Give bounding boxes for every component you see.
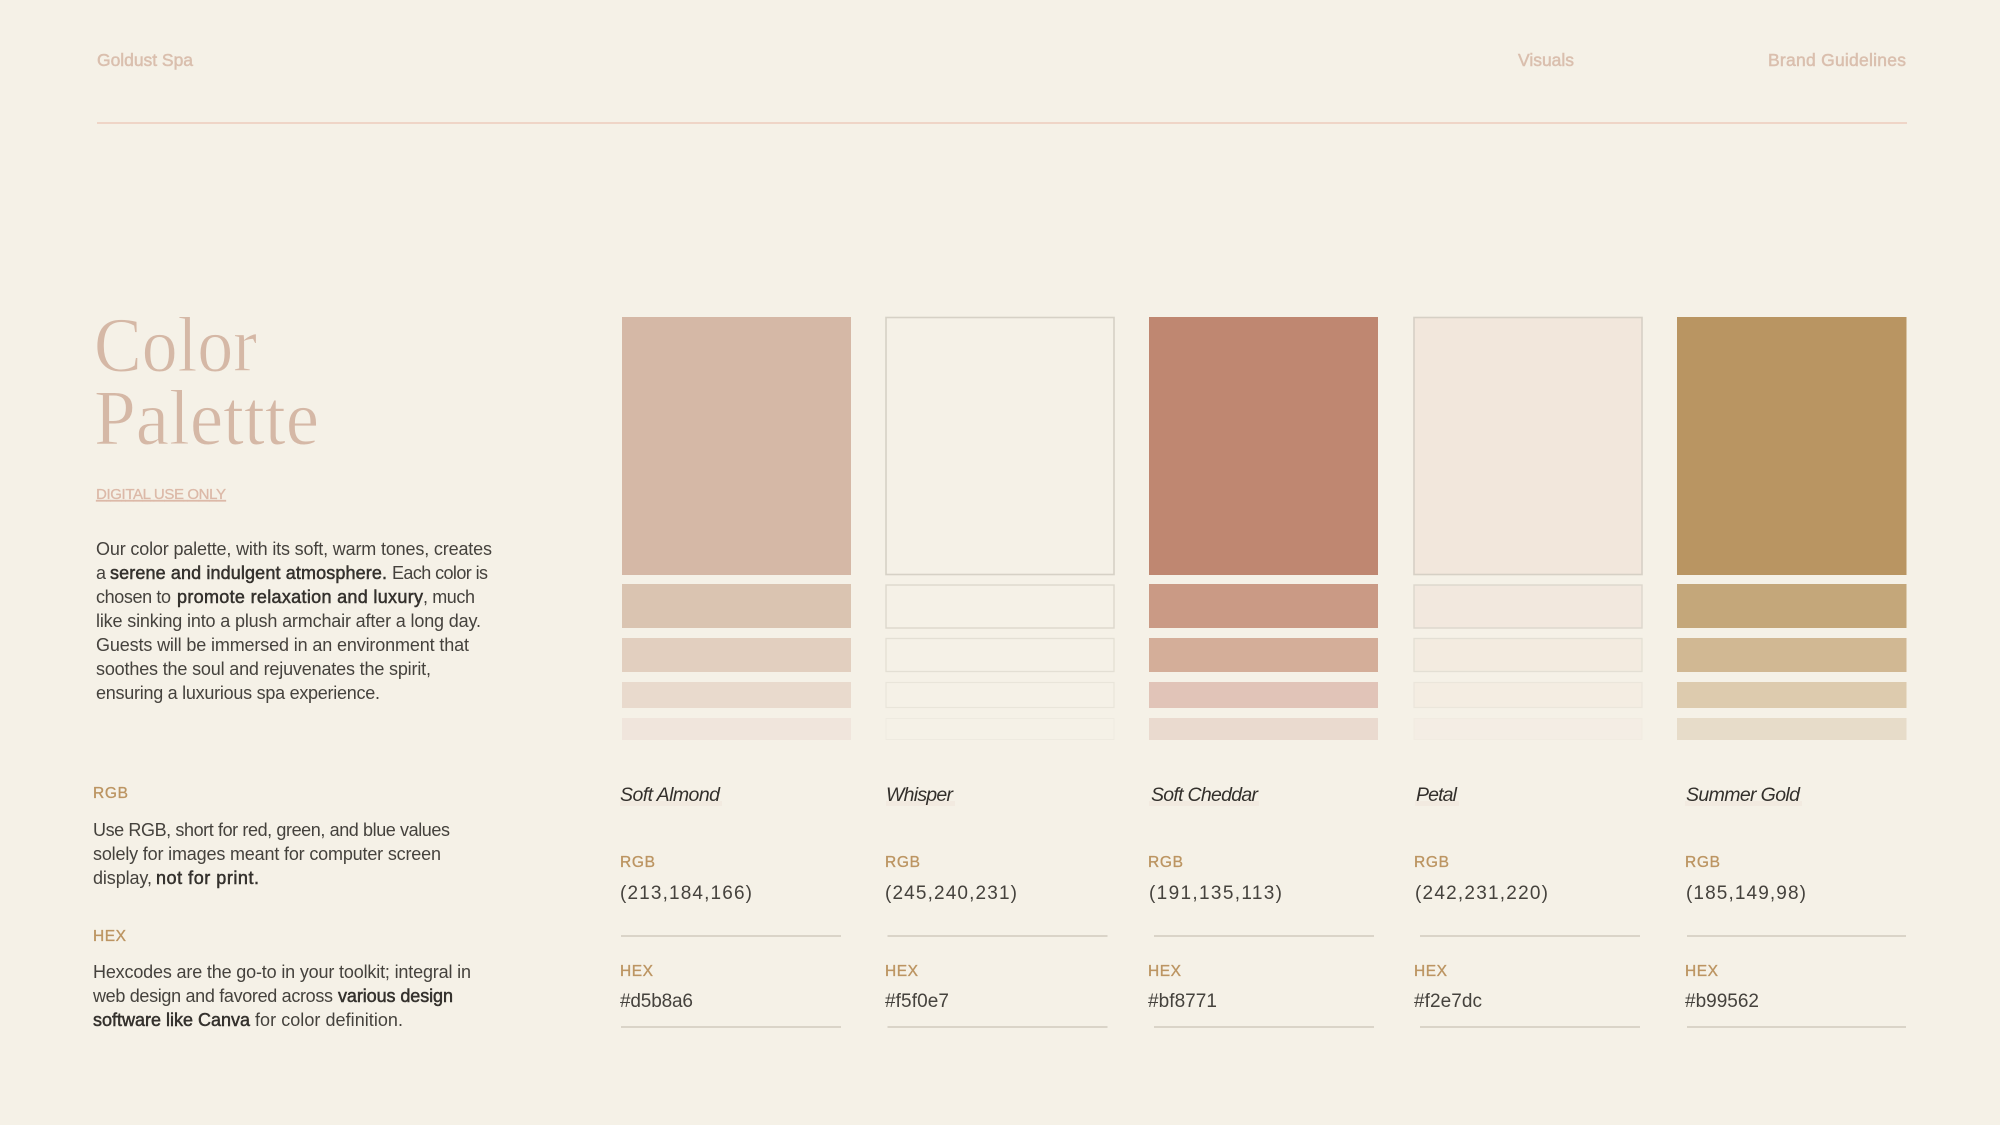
panel: Petal (1414, 318, 1642, 1027)
intro paragraph: serene and indulgent atmosphere. (110, 563, 387, 583)
RGB value (620, 854, 752, 904)
intro paragraph: ensuring a luxurious spa experience. (96, 683, 380, 703)
HEX value (1685, 963, 1759, 1012)
HEX description: software like Canva (93, 1010, 251, 1030)
intro paragraph: a (96, 563, 107, 583)
HEX value (1414, 963, 1482, 1012)
HEX explanation (92, 928, 471, 1030)
RGB heading: RGB (93, 785, 128, 802)
RGB value: (213,184,166) (620, 883, 752, 904)
HEX description: various design (338, 986, 453, 1006)
subtitle: digital use only: DIGITAL USE ONLY (96, 486, 226, 503)
HEX value: #d5b8a6 (620, 991, 693, 1012)
color name: Whisper (886, 784, 954, 806)
color name: Soft Almond (620, 784, 721, 806)
RGB value: RGB (1685, 854, 1720, 871)
intro paragraph: chosen to (96, 587, 171, 607)
title: Color (94, 301, 257, 388)
panel: Summer Gold (1677, 317, 1906, 1027)
swatch stack: Petal (1414, 318, 1642, 740)
RGB value: RGB (1148, 854, 1183, 871)
RGB value: (245,240,231) (885, 883, 1017, 904)
intro paragraph: promote relaxation and luxury (177, 587, 423, 607)
color name: Summer Gold (1686, 784, 1801, 806)
intro paragraph: , much (423, 587, 475, 607)
HEX value (620, 963, 693, 1012)
panel: Soft Almond (620, 317, 851, 1027)
HEX value: HEX (1414, 963, 1448, 980)
RGB value: (242,231,220) (1415, 883, 1548, 904)
header: document name: Brand Guidelines (1768, 50, 1906, 70)
RGB value (1148, 854, 1282, 904)
swatch stack: Summer Gold (1677, 317, 1906, 740)
RGB description: solely for images meant for computer screen (93, 844, 441, 864)
HEX value: #b99562 (1685, 991, 1759, 1012)
panel: Soft Cheddar (1148, 317, 1378, 1027)
HEX value (885, 963, 949, 1012)
RGB explanation (93, 785, 450, 888)
intro paragraph: Our color palette, with its soft, warm tones, creates (96, 539, 492, 559)
HEX value: HEX (1685, 963, 1719, 980)
HEX heading: HEX (93, 928, 127, 945)
HEX value: #f2e7dc (1414, 991, 1482, 1012)
intro paragraph: Each color is (392, 563, 488, 583)
intro paragraph: Guests will be immersed in an environment that (96, 635, 469, 655)
intro paragraph (96, 539, 492, 703)
RGB value: RGB (885, 854, 920, 871)
panel: Whisper (885, 318, 1114, 1027)
RGB value (885, 854, 1017, 904)
RGB value: (191,135,113) (1149, 883, 1282, 904)
intro paragraph: like sinking into a plush armchair after a long day. (96, 611, 481, 631)
title: Palettte (94, 374, 319, 461)
swatch stack: Soft Almond (622, 317, 851, 740)
HEX value (1148, 963, 1217, 1012)
HEX description: web design and favored across (92, 986, 333, 1006)
swatch stack: Soft Cheddar (1149, 317, 1378, 740)
color name: Soft Cheddar (1151, 784, 1260, 806)
RGB description: Use RGB, short for red, green, and blue values (93, 820, 450, 840)
header: section name: Visuals (1518, 50, 1574, 70)
RGB description: display, (93, 868, 152, 888)
RGB value: RGB (620, 854, 655, 871)
RGB value (1685, 854, 1806, 904)
HEX value: #f5f0e7 (885, 991, 949, 1012)
intro paragraph: soothes the soul and rejuvenates the spirit, (96, 659, 431, 679)
HEX description (92, 962, 471, 1030)
swatch stack: Whisper (886, 318, 1114, 740)
RGB value (1414, 854, 1548, 904)
RGB value: (185,149,98) (1686, 883, 1806, 904)
RGB value: RGB (1414, 854, 1449, 871)
HEX description: Hexcodes are the go-to in your toolkit; integral in (93, 962, 471, 982)
HEX value: #bf8771 (1148, 991, 1217, 1012)
RGB description (93, 820, 450, 888)
HEX value: HEX (885, 963, 919, 980)
header: brand name: Goldust Spa (97, 50, 193, 70)
HEX value: HEX (1148, 963, 1182, 980)
HEX value: HEX (620, 963, 654, 980)
title (94, 301, 319, 461)
color name: Petal (1416, 784, 1458, 806)
RGB description: not for print. (156, 868, 259, 888)
HEX description: for color definition. (255, 1010, 403, 1030)
header (97, 50, 1907, 124)
